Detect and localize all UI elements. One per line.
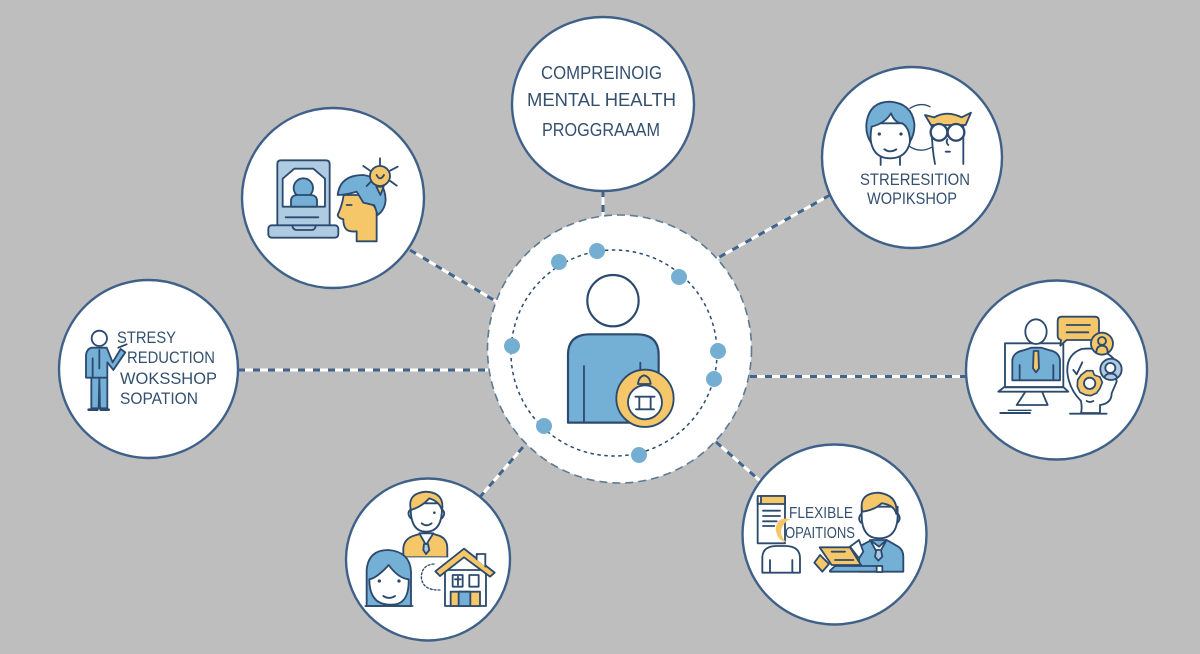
circle	[512, 17, 694, 191]
icon: central person	[568, 275, 674, 427]
panel: flexible options	[742, 444, 926, 624]
icon: badge	[616, 370, 674, 427]
label	[860, 170, 970, 208]
circle	[822, 67, 1002, 248]
label: WOPIKSHOP	[867, 189, 957, 208]
circle	[742, 444, 926, 624]
label: STRERESITION	[860, 170, 970, 189]
panel: stress resilience workshop	[822, 67, 1002, 248]
icon: two faces	[866, 102, 971, 165]
label	[117, 328, 217, 408]
orbit dots	[504, 243, 726, 463]
circle	[966, 280, 1147, 460]
connectors	[238, 190, 967, 497]
label: REDUCTION	[127, 348, 215, 367]
label	[785, 505, 855, 542]
label: WOKSSHOP	[120, 369, 217, 388]
panel: home and family	[346, 478, 510, 640]
icon: presenter	[86, 331, 127, 410]
circle	[242, 108, 424, 288]
panel: comprehensive program	[512, 17, 694, 191]
label: FLEXIBLE	[789, 505, 853, 522]
label: OPAITIONS	[785, 525, 855, 542]
panel: virtual counselling	[966, 280, 1147, 460]
label	[527, 63, 676, 140]
panel: online learning	[242, 108, 424, 288]
icon: document, woman and man with book	[758, 493, 903, 573]
icon: laptop and thinking head	[268, 158, 398, 241]
label: SOPATION	[120, 389, 198, 408]
hub disc	[488, 215, 752, 483]
panel: stress reduction workshop	[59, 280, 238, 458]
icon: monitor and head with gear	[998, 317, 1122, 414]
icon: man, woman and house	[365, 492, 495, 606]
circle	[346, 478, 510, 640]
label: STRESY	[117, 328, 176, 347]
circle	[59, 280, 238, 458]
label: PROGGRAAAM	[542, 120, 660, 140]
label: MENTAL HEALTH	[527, 90, 676, 110]
label: COMPREINOIG	[541, 63, 662, 83]
orbit ring	[511, 250, 717, 456]
central hub	[488, 215, 752, 483]
